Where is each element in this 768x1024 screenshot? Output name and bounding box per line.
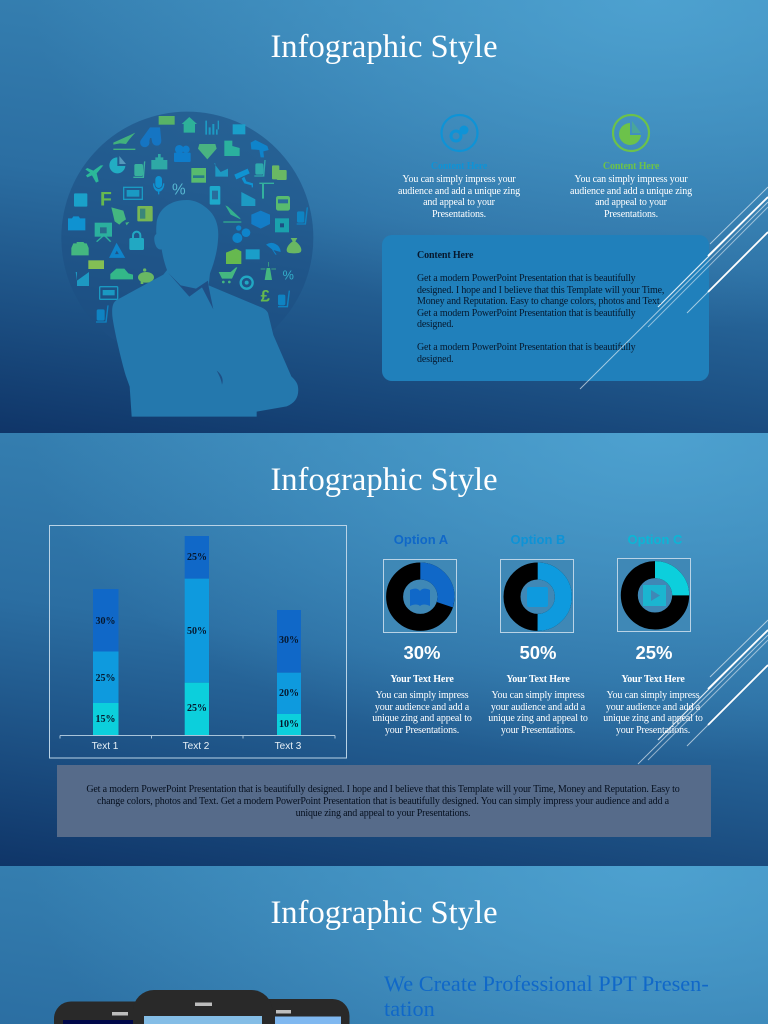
icon: car	[110, 269, 133, 279]
icon: office building	[151, 154, 167, 169]
icon: wallet	[226, 249, 241, 264]
title: Infographic Style	[270, 462, 498, 498]
heading: Content Here	[603, 161, 659, 172]
decorative diagonal lines	[580, 186, 768, 390]
bar: Text 3: 10%	[279, 719, 299, 730]
paragraph 1	[417, 273, 664, 330]
paragraph 1: Get a modern PowerPoint Presentation that is beautifully	[417, 308, 636, 319]
icon: crane	[259, 183, 274, 199]
paragraph	[86, 784, 680, 819]
icon: compass	[241, 277, 253, 289]
icon: bar chart	[205, 121, 219, 135]
paragraph: your Presentations.	[616, 725, 690, 736]
paragraph	[372, 690, 472, 736]
value 50%: 50%	[519, 642, 557, 663]
illustration: businessman with icon circle	[62, 112, 314, 417]
axis labels	[92, 741, 302, 752]
icon: microphone	[153, 176, 164, 194]
paragraph: and appeal to your	[595, 197, 667, 208]
phone centre	[133, 990, 272, 1024]
icon: document	[74, 193, 87, 207]
option C heading: Option C	[628, 532, 682, 547]
slide 1	[0, 0, 768, 433]
icon: airplane	[113, 133, 135, 150]
bar: Text 3	[277, 610, 301, 735]
icon: bus	[276, 196, 290, 211]
panel: content box	[382, 235, 709, 381]
icon: security camera	[234, 169, 253, 187]
icon: money bag	[287, 238, 301, 253]
bar: Text 2: 25%	[187, 703, 207, 714]
icon cloud	[68, 116, 308, 323]
icon: falling chart	[241, 192, 255, 206]
bar: Text 3: 30%	[279, 635, 299, 646]
panel: grey summary banner	[57, 765, 711, 837]
paragraph: change colors, photos and Text. Get a modern PowerPoint Presentation that is beautifully designed. You can simply impress your audience and add a	[97, 796, 669, 807]
paragraph	[570, 174, 692, 220]
paragraph: your audience and add a	[491, 702, 585, 713]
donut B 50%	[500, 559, 574, 633]
paragraph: Presentations.	[432, 208, 486, 220]
bar: Text 1	[93, 589, 118, 735]
icon: luggage trolley	[133, 161, 145, 178]
dark circle backdrop	[61, 112, 313, 364]
bar: Text 2	[185, 536, 209, 735]
paragraph: Get a modern PowerPoint Presentation that is beautifully designed. I hope and I believe that this Template will your Time, Money and Reputation. Easy to	[86, 784, 680, 795]
text block: option B	[488, 674, 588, 736]
paragraph: You can simply impress your	[574, 174, 688, 185]
title: Infographic Style	[270, 29, 498, 65]
icon: growth chart	[214, 163, 228, 177]
bar: Text 1: 30%	[96, 616, 116, 627]
paragraph: You can simply impress	[491, 690, 585, 701]
paragraph: your Presentations.	[501, 725, 575, 736]
axis labels: Text 1	[92, 741, 119, 752]
paragraph: Presentations.	[604, 208, 658, 220]
bar: Text 1: 15%	[96, 714, 116, 725]
slide 3	[0, 866, 768, 1024]
bar: Text 3: 20%	[279, 688, 299, 699]
text block: option C	[603, 674, 703, 736]
heading: we create	[384, 971, 709, 1021]
slide 2	[0, 433, 768, 866]
text block: content left	[398, 161, 520, 220]
icon: house	[182, 117, 197, 133]
heading: Your Text Here	[390, 674, 454, 685]
paragraph: You can simply impress	[606, 690, 700, 701]
paragraph: your audience and add a	[606, 702, 700, 713]
paragraph: and appeal to your	[423, 197, 495, 208]
paragraph: You can simply impress your	[402, 174, 516, 185]
phones illustration	[54, 990, 350, 1024]
heading: we create: tation	[384, 996, 435, 1021]
paragraph: audience and add a unique zing	[570, 186, 692, 196]
icon: taxi	[71, 242, 89, 255]
icon: safe	[137, 206, 153, 221]
silhouette of businessman	[112, 200, 298, 417]
paragraph 2	[417, 342, 636, 365]
donut C 25%	[617, 558, 691, 632]
icon: barcode card	[124, 187, 142, 199]
paragraph: unique zing and appeal to your Presentations.	[296, 808, 470, 819]
paragraph 1: Money and Reputation. Easy to change colors, photos and Text.	[417, 296, 662, 307]
paragraph	[398, 174, 520, 220]
icon: ATM card	[100, 287, 118, 299]
icon: luggage trolley 2	[254, 160, 266, 177]
icon: rocket	[111, 207, 129, 225]
paragraph: You can simply impress	[375, 690, 469, 701]
icon: presentation board	[95, 223, 112, 242]
paragraph: audience and add a unique zing	[398, 186, 520, 196]
feature icon: pie chart circle	[612, 114, 650, 152]
icon: landing plane	[223, 205, 241, 223]
heading: Content Here	[431, 161, 487, 172]
title: Infographic Style	[270, 895, 498, 931]
heading: Your Text Here	[621, 674, 685, 685]
icon: piggy bank	[138, 268, 154, 284]
paragraph: unique zing and appeal to	[372, 713, 472, 724]
text block: content right	[570, 161, 692, 220]
icon: padlock	[129, 231, 144, 250]
icon: megaphone	[251, 140, 269, 157]
icon: banknote	[159, 116, 175, 125]
icon: banknote 2	[88, 260, 104, 269]
paragraph: your Presentations.	[385, 725, 459, 736]
axis	[60, 736, 335, 738]
paragraph 2: Get a modern PowerPoint Presentation that is beautifully	[417, 342, 636, 353]
icon: luggage trolley 4	[278, 291, 290, 307]
heading: we create: We Create Professional PPT Presen-	[384, 971, 709, 996]
icon: recycle	[112, 247, 122, 256]
icon: binoculars	[140, 127, 161, 147]
icon: percent sign 2: %	[283, 268, 294, 282]
icon: umbrella	[266, 243, 281, 255]
phone left	[54, 1002, 154, 1024]
icon: pound sign: £	[261, 286, 271, 305]
value 30%: 30%	[403, 642, 441, 663]
bar: Text 2: 25%	[187, 552, 207, 563]
icon: lighthouse	[261, 262, 276, 280]
icon: folder	[233, 124, 245, 134]
icon: growth chart 2	[76, 272, 89, 286]
paragraph	[603, 690, 703, 736]
icon: photo camera	[68, 216, 85, 230]
axis labels: Text 2	[183, 741, 210, 752]
paragraph 1: designed.	[417, 319, 454, 330]
icon: factory	[224, 141, 240, 156]
bar: Text 1: 25%	[96, 673, 116, 684]
icon: cardboard box	[251, 211, 270, 229]
bar: Text 2: 50%	[187, 626, 207, 637]
chart frame	[50, 526, 346, 758]
heading: Content Here	[417, 250, 473, 261]
icon: film camera	[174, 145, 191, 162]
feature icon: gears circle	[440, 114, 478, 152]
icon: percent sign: %	[172, 181, 186, 198]
option B heading: Option B	[511, 532, 565, 547]
icon: diamond	[198, 144, 217, 159]
text block: option A	[372, 674, 472, 736]
paragraph	[488, 690, 588, 736]
icon: luggage trolley 5	[96, 305, 109, 323]
icon: shopping bag	[272, 165, 287, 180]
paragraph: your audience and add a	[375, 702, 469, 713]
paragraph: unique zing and appeal to	[603, 713, 703, 724]
icon: QR code	[275, 218, 289, 232]
decorative diagonal lines	[638, 620, 768, 764]
value 25%: 25%	[635, 642, 673, 663]
icon: pie chart	[109, 156, 126, 173]
icon: shop	[191, 168, 206, 183]
phone right	[250, 999, 350, 1024]
paragraph 1: designed. I hope and I believe that this Template will your Time,	[417, 285, 664, 296]
icon: franc sign: F	[100, 189, 112, 210]
paragraph 2: designed.	[417, 354, 454, 365]
icon: shopping cart	[219, 267, 237, 283]
icon: luggage trolley 3	[297, 207, 308, 225]
icon: gears	[232, 225, 250, 243]
paragraph: unique zing and appeal to	[488, 713, 588, 724]
option A heading: Option A	[394, 532, 448, 547]
icon: folder 2	[246, 249, 260, 259]
donut A 30%	[383, 559, 457, 633]
stacked bar chart	[49, 525, 347, 758]
heading: Your Text Here	[506, 674, 570, 685]
icon: airplane 2	[85, 165, 103, 183]
icon: ID badge	[210, 186, 220, 205]
axis labels: Text 3	[275, 741, 302, 752]
paragraph 1: Get a modern PowerPoint Presentation that is beautifully	[417, 273, 636, 284]
